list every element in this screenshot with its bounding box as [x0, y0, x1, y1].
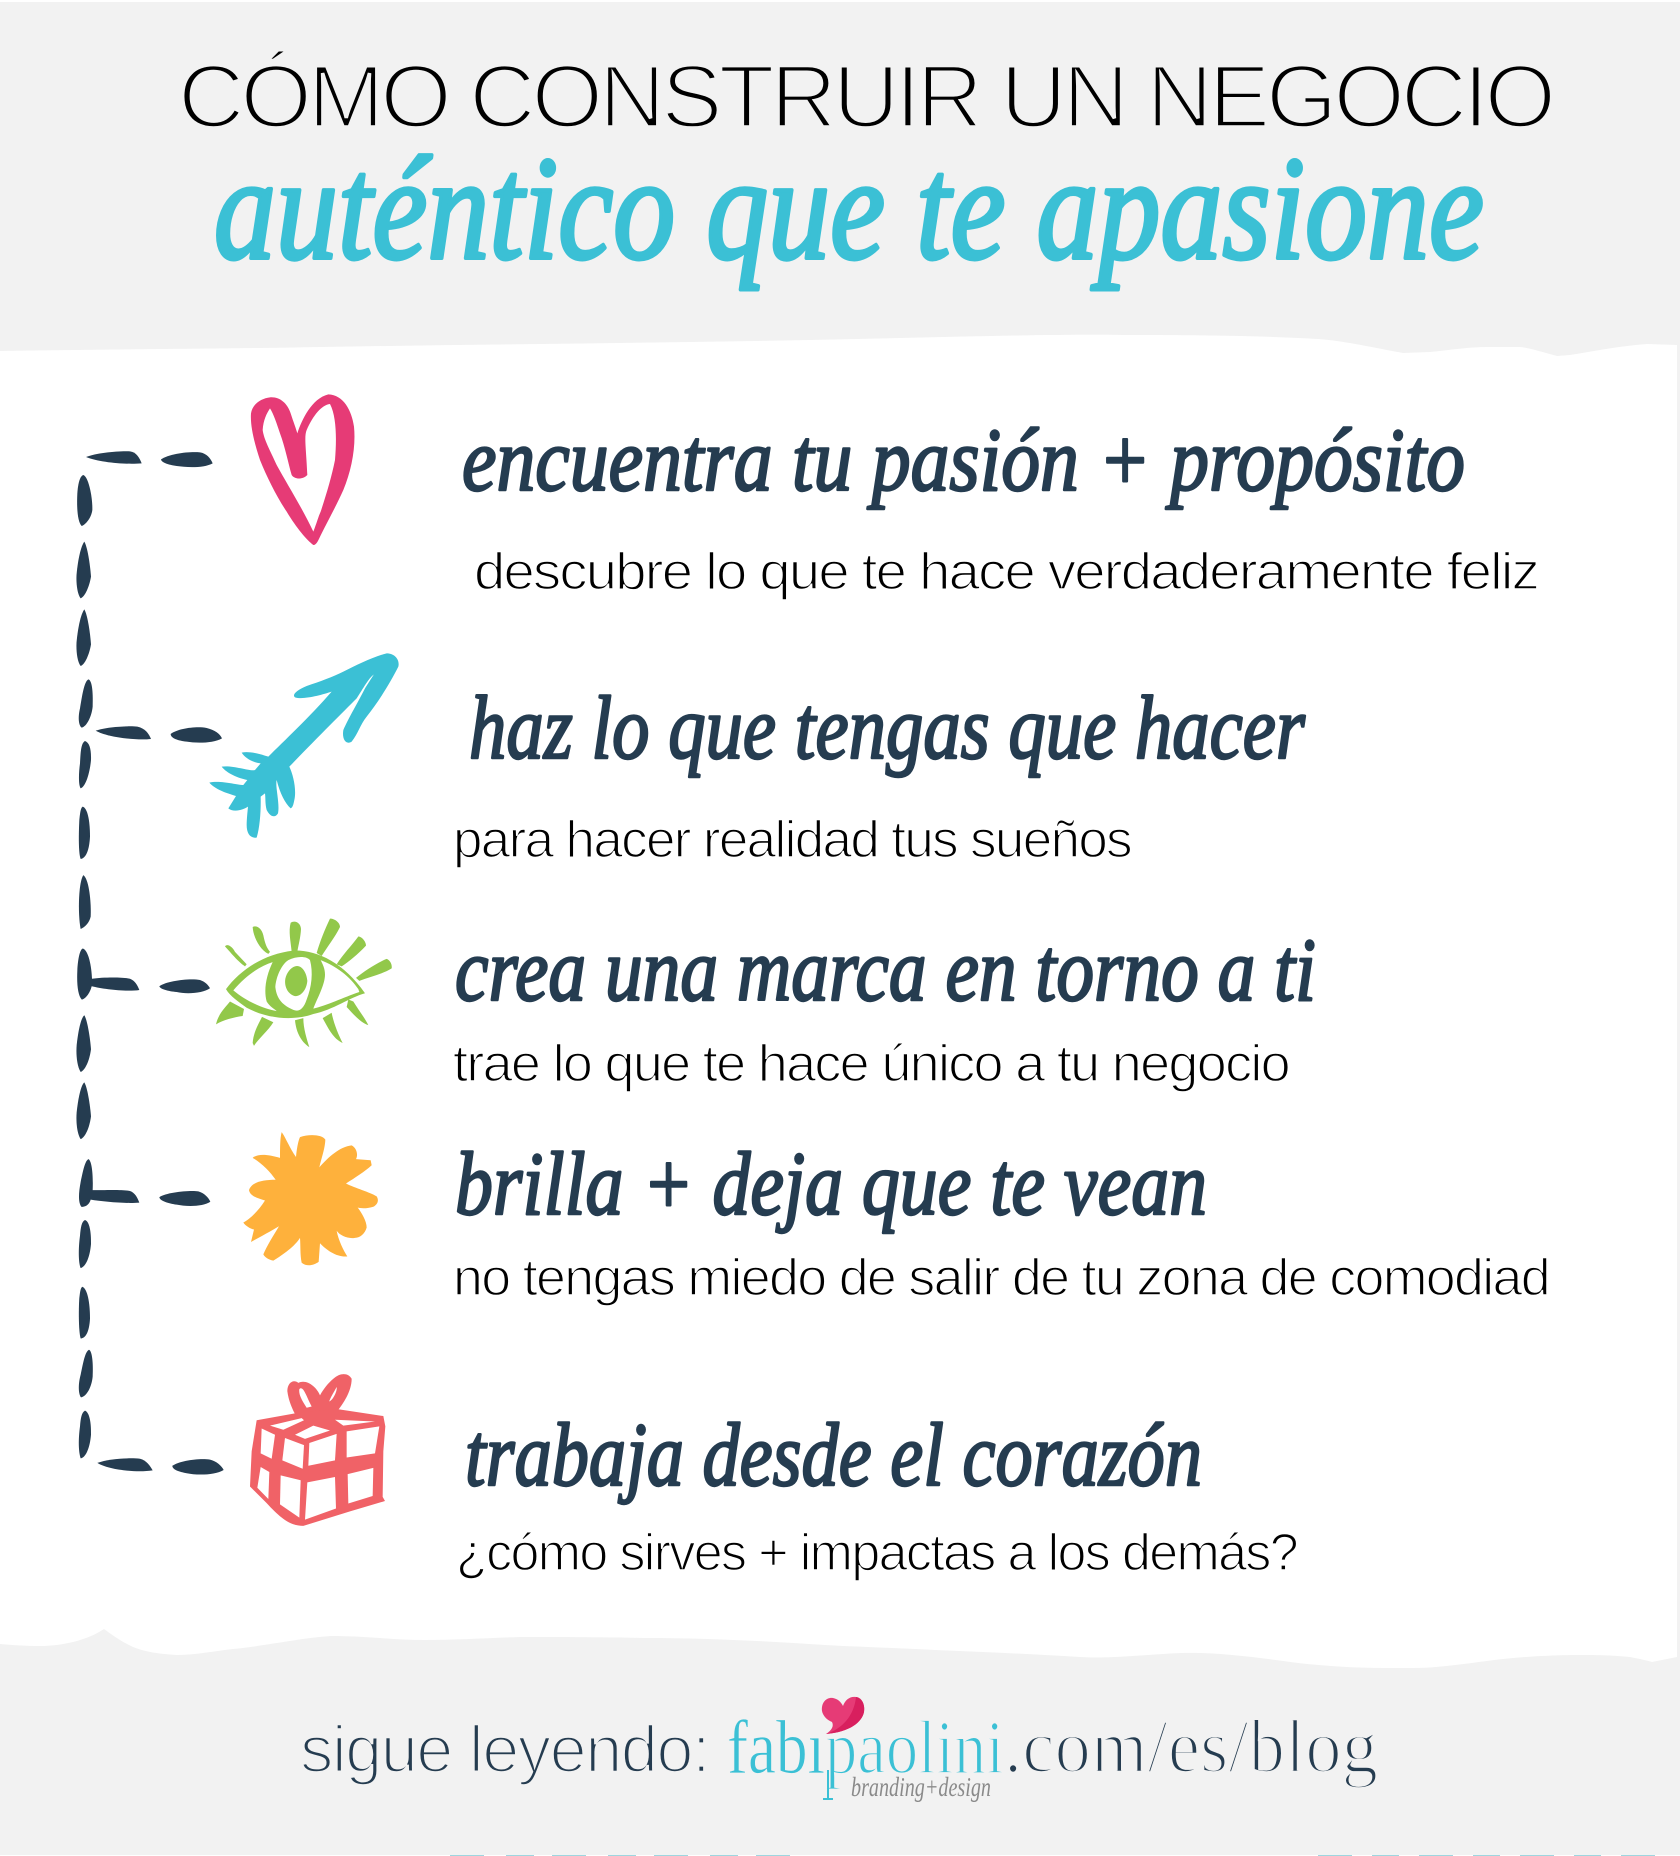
step 4 heading: brilla + deja que te vean: [455, 1135, 1207, 1234]
step 1 heading: encuentra tu pasión + propósito: [462, 411, 1465, 510]
icon: blue arrow: [209, 653, 399, 838]
icon: pink heart: [251, 394, 354, 545]
step 1 text: [462, 411, 1538, 601]
logo wordmark: fabı: [727, 1706, 825, 1790]
dashed connector: [76, 451, 224, 1475]
icon: orange starburst: [243, 1132, 378, 1265]
step 5 description: ¿cómo sirves + impactas a los demás?: [456, 1524, 1297, 1582]
footer lead-in text: sigue leyendo:: [300, 1712, 709, 1786]
step 4 text: [453, 1135, 1549, 1307]
step 3 description: trae lo que te hace único a tu negocio: [453, 1035, 1289, 1093]
step 3 text: [453, 921, 1316, 1093]
step 1 description: descubre lo que te hace verdaderamente feliz: [474, 543, 1538, 601]
step 2 text: [453, 679, 1306, 869]
logo wordmark: paolini: [825, 1706, 1004, 1790]
step 2 heading: haz lo que tengas que hacer: [469, 679, 1306, 778]
icon: coral gift box: [250, 1374, 385, 1526]
step 2 description: para hacer realidad tus sueños: [453, 811, 1132, 869]
footer link: [300, 1697, 1378, 1802]
title line 1: CÓMO CONSTRUIR UN NEGOCIO: [178, 46, 1552, 146]
icon: logo heart: [822, 1697, 864, 1734]
step 3 heading: crea una marca en torno a ti: [455, 921, 1316, 1020]
icon: green eye: [216, 919, 392, 1047]
footer URL: .com/es/blog: [1004, 1705, 1378, 1789]
title: [178, 46, 1552, 291]
step 4 description: no tengas miedo de salir de tu zona de comodiad: [453, 1249, 1549, 1307]
step 5 heading: trabaja desde el corazón: [465, 1406, 1202, 1505]
panel: white torn-paper body: [0, 335, 1677, 1668]
logo tagline: branding+design: [851, 1772, 991, 1802]
logo wordmark: [727, 1706, 1004, 1800]
step 5 text: [456, 1406, 1297, 1582]
